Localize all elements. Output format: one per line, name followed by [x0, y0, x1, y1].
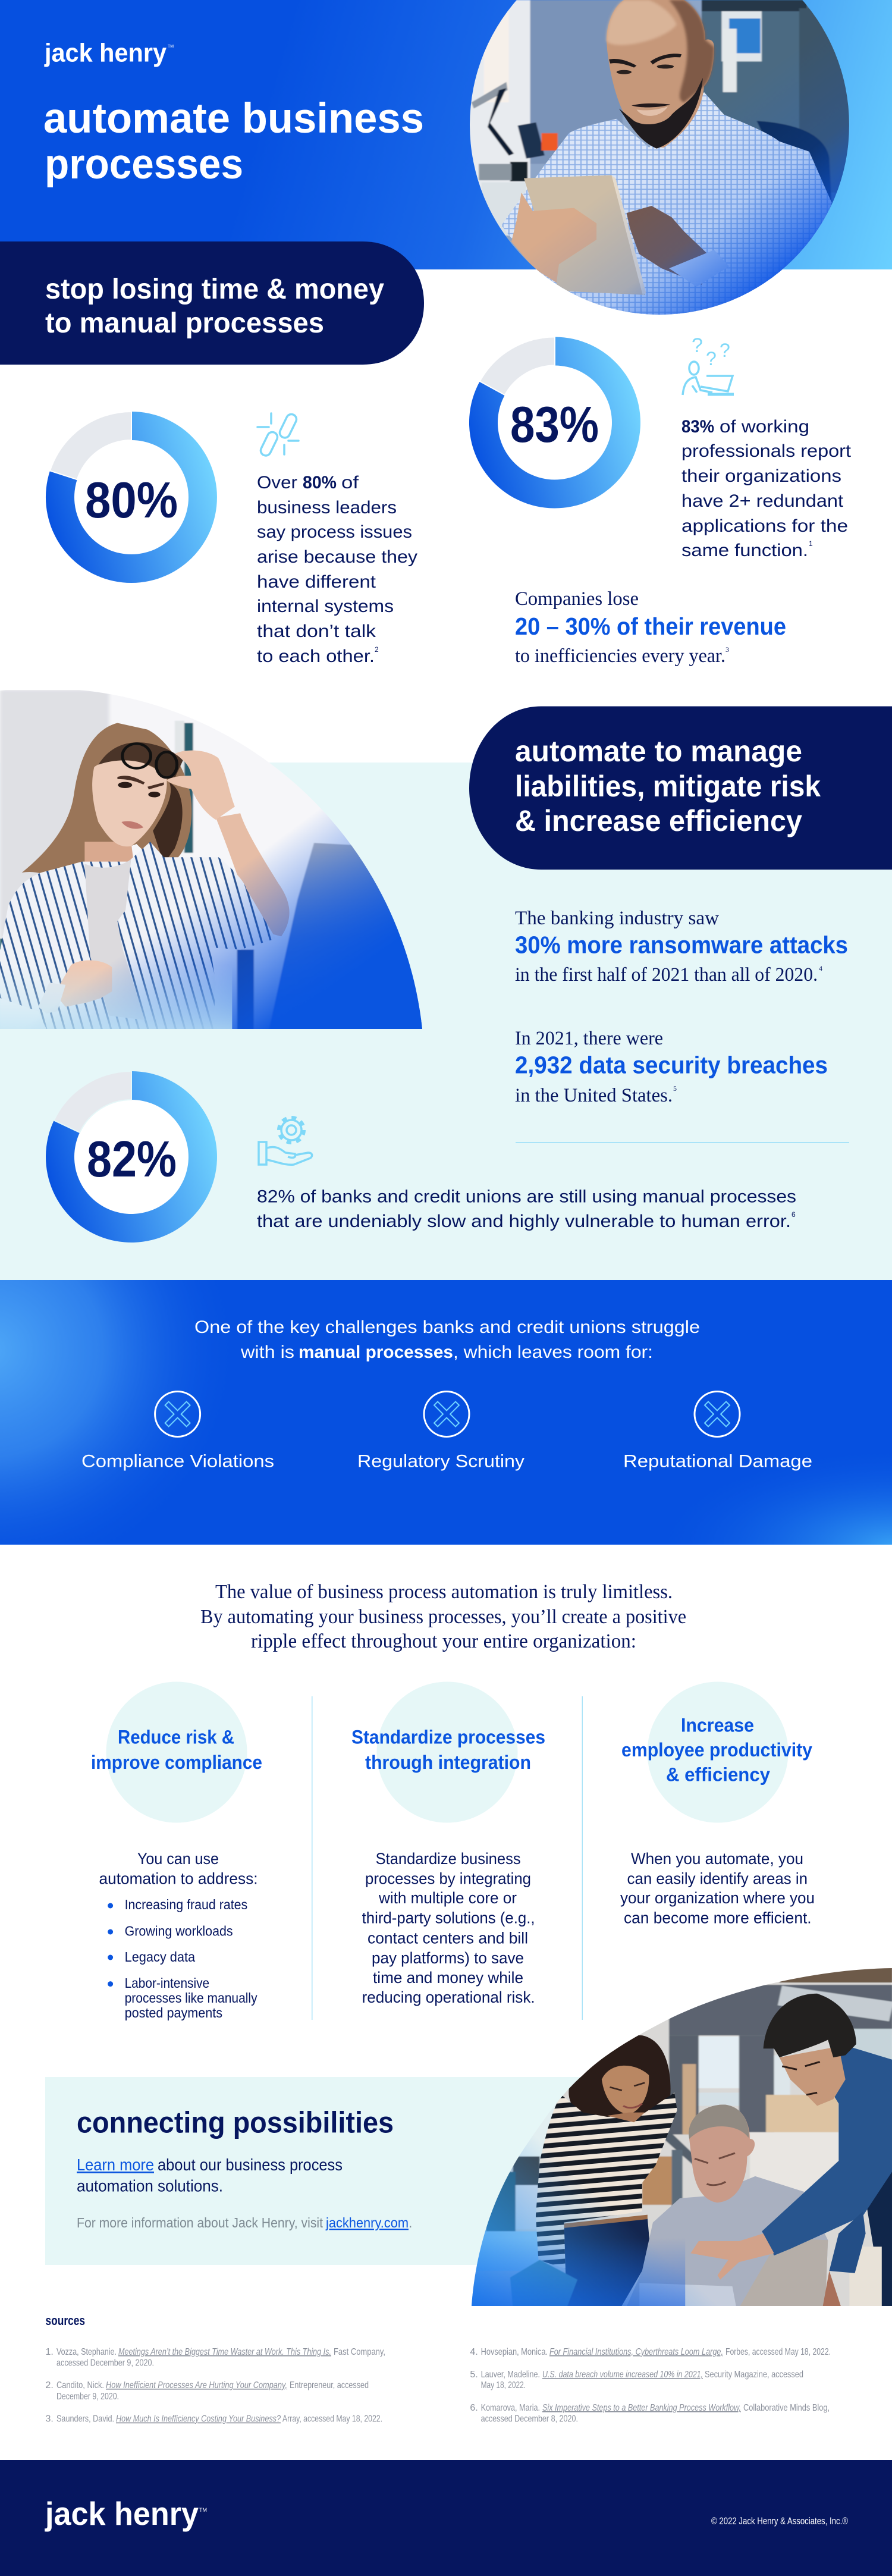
- hand: [690, 2233, 774, 2280]
- text: 82% of banks: 82% of banks and credit unions are still using manual processes: [257, 1187, 796, 1206]
- heading pill: automate to manage liabilities: [469, 707, 892, 870]
- right hand: [627, 206, 714, 285]
- source 3: Saunders, David.: [56, 2414, 114, 2424]
- text: over 80% of business leaders: have different: [257, 572, 376, 592]
- bullet list: processes like manually: [125, 1990, 257, 2006]
- text: 83% of working professionals: 83%: [681, 417, 714, 437]
- source 2: Candito, Nick.: [56, 2380, 104, 2390]
- icon: confused person at laptop: ?: [692, 334, 703, 357]
- icon: x circle 1: [155, 1392, 200, 1437]
- cta text: [77, 2155, 343, 2195]
- heading pill: stop losing time and money: [0, 241, 424, 365]
- source 1: 1.: [45, 2347, 54, 2357]
- column body: automation to address:: [99, 1870, 258, 1888]
- bullet list: Labor-intensive: [125, 1975, 209, 1991]
- column body: [99, 1850, 258, 1888]
- source 6: [470, 2403, 830, 2424]
- column heading: improve compliance: [91, 1752, 262, 1773]
- heading pill: automate to manage liabilities: & increase efficiency: [515, 804, 802, 837]
- text: 82% of banks: 6: [792, 1210, 796, 1219]
- bullet list: posted payments: [125, 2005, 222, 2020]
- bullet list: [108, 1897, 257, 2020]
- face: [92, 759, 167, 846]
- icon: confused person at laptop: ?: [706, 348, 717, 369]
- woman belt: [564, 2215, 648, 2228]
- hero background: [0, 0, 892, 269]
- source 5: Security Magazine, accessed: [705, 2370, 803, 2380]
- column heading: [91, 1727, 262, 1773]
- intro text: , which leaves room for:: [453, 1342, 653, 1362]
- intro paragraph: value of automation: [200, 1581, 686, 1652]
- intro text: [194, 1317, 700, 1362]
- stat: data security breaches: 2,932 data security breaches: [515, 1052, 828, 1079]
- column body: processes by integrating: [365, 1870, 531, 1888]
- logo: jack henry: TM: [168, 45, 174, 49]
- face: [607, 0, 714, 148]
- tablet: [524, 175, 645, 295]
- tee: [84, 859, 145, 1020]
- shirt: [501, 92, 832, 321]
- column: standardize processes: [351, 1682, 545, 2006]
- donut chart: 82%: 82%: [87, 1131, 177, 1188]
- donut chart: 83%: 83%: [510, 397, 599, 453]
- source 4: [470, 2347, 831, 2357]
- title: automate business: [43, 95, 424, 142]
- photo: team around tablet: [470, 1963, 892, 2308]
- text: 82% of banks: [257, 1187, 796, 1231]
- heading pill: stop losing time and money: stop losing time & money: [45, 274, 384, 305]
- source 2: 2.: [45, 2380, 54, 2390]
- stat: revenue loss: [515, 588, 786, 667]
- cta heading: connecting possibilities: [77, 2106, 394, 2139]
- sources: sources: [45, 2313, 85, 2328]
- column heading: [621, 1714, 812, 1786]
- stat: revenue loss: to inefficiencies every year.: [515, 645, 725, 667]
- column heading: [351, 1727, 545, 1773]
- intro paragraph: value of automation: The value of business process automation is truly limitless.: [215, 1581, 673, 1603]
- lower hand: [55, 960, 112, 1007]
- brows and eyes: [609, 59, 636, 68]
- footer logo: TM: [199, 2507, 207, 2513]
- cta text: Learn more: [77, 2155, 154, 2174]
- more information line: .: [409, 2215, 412, 2230]
- donut chart: 82%: [46, 1071, 217, 1242]
- source 1: Vozza, Stephanie.: [56, 2347, 117, 2357]
- source 5: 5.: [470, 2370, 478, 2380]
- intro text: One of the key challenges banks and credit unions struggle: [194, 1317, 700, 1337]
- intro paragraph: value of automation: ripple effect throughout your entire organization:: [251, 1630, 636, 1652]
- neck: [84, 842, 134, 866]
- text: 83% of working professionals: professionals report: [681, 441, 852, 461]
- text: over 80% of business leaders: that don’t talk: [257, 622, 376, 641]
- cta text: about our business process: [158, 2155, 343, 2174]
- text: over 80% of business leaders: Over: [257, 473, 297, 492]
- label: compliance violations: Compliance Violations: [81, 1452, 274, 1471]
- sources: [45, 2313, 831, 2424]
- fades: [0, 690, 428, 1035]
- more information line: jackhenry.com: [325, 2215, 409, 2230]
- column body: [620, 1850, 815, 1927]
- stat: ransomware attacks: 4: [819, 964, 822, 972]
- source 4: 4.: [470, 2347, 478, 2357]
- heading pill: automate to manage liabilities: automate to manage: [515, 735, 802, 768]
- label: reputational damage: Reputational Damage: [623, 1452, 812, 1471]
- icon: broken chain link: [257, 413, 299, 457]
- young man hair: [764, 1994, 856, 2057]
- source 1: Fast Company,: [334, 2347, 385, 2357]
- column body: can become more efficient.: [624, 1909, 812, 1927]
- title: processes: [45, 141, 243, 188]
- stat: ransomware attacks: in the first half of 2021 than all of 2020.: [515, 964, 818, 986]
- column heading: & efficiency: [666, 1764, 770, 1786]
- column body: contact centers and bill: [368, 1929, 528, 1947]
- text: 83% of working professionals: [681, 417, 852, 560]
- cta text: automation solutions.: [77, 2177, 223, 2195]
- intro paragraph: value of automation: By automating your business processes, you’ll create a positive: [200, 1606, 686, 1628]
- intro text: manual processes: [299, 1342, 453, 1362]
- source 6: Six Imperative Steps to a Better Banking Process Workflow,: [542, 2403, 741, 2413]
- hair top: [98, 742, 183, 778]
- source 1: [45, 2347, 385, 2368]
- heading pill: stop losing time and money: to manual processes: [45, 308, 324, 339]
- striped shirt: [0, 842, 276, 1035]
- stat: revenue loss: 20 – 30% of their revenue: [515, 613, 786, 640]
- donut chart: 80%: [46, 412, 217, 583]
- bullet list: Legacy data: [125, 1949, 195, 1965]
- bullet list: Increasing fraud rates: [125, 1897, 247, 1912]
- source 3: [45, 2414, 382, 2424]
- icon: gear over open hand: [259, 1118, 312, 1165]
- bullet list: Growing workloads: [125, 1924, 233, 1939]
- glasses: [123, 743, 150, 768]
- photo: man with tablet: [464, 0, 857, 321]
- label: regulatory scrutiny: Regulatory Scrutiny: [357, 1452, 524, 1471]
- plant: [510, 2260, 577, 2308]
- woman shirt: [536, 2092, 677, 2268]
- blue fade: [464, 0, 856, 321]
- more information line: For more information about Jack Henry, visit: [77, 2215, 323, 2230]
- text: over 80% of business leaders: arise because they: [257, 547, 417, 567]
- column body: reducing operational risk.: [362, 1988, 535, 2006]
- column body: [362, 1850, 535, 2006]
- text: 83% of working professionals: same function.: [681, 541, 808, 560]
- column body: time and money while: [373, 1969, 523, 1987]
- text: over 80% of business leaders: business leaders: [257, 498, 397, 517]
- source 6: Collaborative Minds Blog,: [743, 2403, 830, 2413]
- text: 83% of working professionals: applications for the: [681, 516, 848, 536]
- source 1: Meetings Aren’t the Biggest Time Waster at Work. This Thing Is.: [118, 2347, 331, 2357]
- woman hair: [569, 2035, 671, 2121]
- source 2: December 9, 2020.: [56, 2392, 119, 2402]
- raised hand: [167, 751, 235, 820]
- stat: ransomware attacks: [515, 908, 848, 986]
- title: [43, 95, 424, 188]
- source 5: Lauver, Madeline.: [481, 2370, 540, 2380]
- section background: light panel: [0, 763, 892, 1280]
- column heading: employee productivity: [621, 1739, 812, 1761]
- source 6: Komarova, Maria.: [481, 2403, 540, 2413]
- photo: woman lifting glasses: [0, 690, 442, 1038]
- donut chart: 80%: 80%: [85, 472, 178, 529]
- source 6: accessed December 8, 2020.: [481, 2414, 578, 2424]
- copyright: © 2022 Jack Henry & Associates, Inc.®: [711, 2515, 848, 2527]
- text: 83% of working professionals: their organizations: [681, 466, 841, 486]
- column body: your organization where you: [620, 1889, 815, 1907]
- text: over 80% of business leaders: [257, 473, 417, 666]
- fades: [470, 1963, 892, 2308]
- stat: ransomware attacks: 30% more ransomware attacks: [515, 931, 848, 959]
- young man body: [863, 2172, 892, 2308]
- donut chart: 83%: [469, 337, 640, 508]
- stat: data security breaches: [515, 1028, 828, 1106]
- woman jeans: [564, 2218, 650, 2308]
- column heading: through integration: [365, 1752, 531, 1773]
- source 3: 3.: [45, 2414, 54, 2424]
- text: 83% of working professionals: of working: [720, 417, 809, 437]
- source 4: Forbes, accessed May 18, 2022.: [725, 2347, 831, 2357]
- stat: ransomware attacks: The banking industry saw: [515, 908, 719, 929]
- text: over 80% of business leaders: of: [341, 473, 359, 492]
- stat: data security breaches: in the United States.: [515, 1085, 673, 1106]
- text: over 80% of business leaders: internal systems: [257, 597, 394, 616]
- stat: revenue loss: Companies lose: [515, 588, 639, 610]
- logo: jack henry: jack henry: [44, 38, 167, 68]
- column heading: Standardize processes: [351, 1727, 545, 1748]
- stat: data security breaches: 5: [673, 1084, 677, 1093]
- column body: You can use: [137, 1850, 219, 1868]
- column body: with multiple core or: [378, 1889, 517, 1907]
- source 4: For Financial Institutions, Cyberthreats Loom Large,: [549, 2347, 723, 2357]
- source 5: U.S. data breach volume increased 10% in 2021,: [542, 2370, 703, 2380]
- column heading: Reduce risk &: [118, 1727, 234, 1748]
- column: reduce risk: [91, 1682, 262, 2020]
- heading pill: automate to manage liabilities: liabilities, mitigate risk: [515, 770, 821, 803]
- column: increase productivity: [620, 1682, 815, 1927]
- footer logo: jack henry: [45, 2495, 199, 2532]
- icon: confused person at laptop: ?: [720, 340, 730, 361]
- source 5: [470, 2370, 803, 2390]
- text: over 80% of business leaders: to each other.: [257, 647, 375, 666]
- icon: confused person at laptop: [683, 334, 734, 395]
- icon: x circle 3: [695, 1392, 740, 1437]
- column body: can easily identify areas in: [627, 1870, 808, 1888]
- icon: x circle 2: [424, 1392, 469, 1437]
- text: over 80% of business leaders: say process issues: [257, 522, 412, 542]
- stat: data security breaches: In 2021, there were: [515, 1028, 663, 1049]
- column body: third-party solutions (e.g.,: [362, 1909, 535, 1927]
- text: 82% of banks: that are undeniably slow and highly vulnerable to human error.: [257, 1212, 791, 1231]
- source 3: How Much Is Inefficiency Costing Your Business?: [116, 2414, 281, 2424]
- intro text: with is: [240, 1342, 294, 1362]
- source 6: 6.: [470, 2403, 478, 2413]
- panel: manual process risks: [0, 1280, 892, 1545]
- young man face: [780, 2047, 846, 2106]
- arm: [216, 813, 290, 936]
- column heading: Increase: [681, 1714, 754, 1736]
- text: over 80% of business leaders: 2: [375, 645, 379, 654]
- tablet: [639, 2283, 736, 2308]
- source 2: [45, 2380, 369, 2402]
- column body: Standardize business: [376, 1850, 521, 1868]
- left hand: [511, 193, 596, 283]
- column body: When you automate, you: [631, 1850, 803, 1868]
- beard: [619, 78, 703, 149]
- source 2: How Inefficient Processes Are Hurting Your Company,: [106, 2380, 287, 2390]
- footer: [0, 2460, 892, 2576]
- source 5: May 18, 2022.: [481, 2380, 526, 2390]
- panel: connecting possibilities: [45, 2077, 595, 2265]
- source 4: Hovsepian, Monica.: [481, 2347, 548, 2357]
- stat: revenue loss: 3: [725, 645, 729, 654]
- woman face: [602, 2066, 649, 2114]
- column body: pay platforms) to save: [372, 1949, 524, 1967]
- source 2: Entrepreneur, accessed: [290, 2380, 369, 2390]
- source 3: Array, accessed May 18, 2022.: [282, 2414, 382, 2424]
- text: 83% of working professionals: 1: [809, 539, 813, 548]
- text: 83% of working professionals: have 2+ redundant: [681, 491, 844, 511]
- old man shirt: [626, 2176, 828, 2308]
- source 1: accessed December 9, 2020.: [56, 2358, 154, 2368]
- text: over 80% of business leaders: 80%: [303, 473, 337, 492]
- old man head: [689, 2105, 755, 2202]
- hair back: [22, 723, 191, 910]
